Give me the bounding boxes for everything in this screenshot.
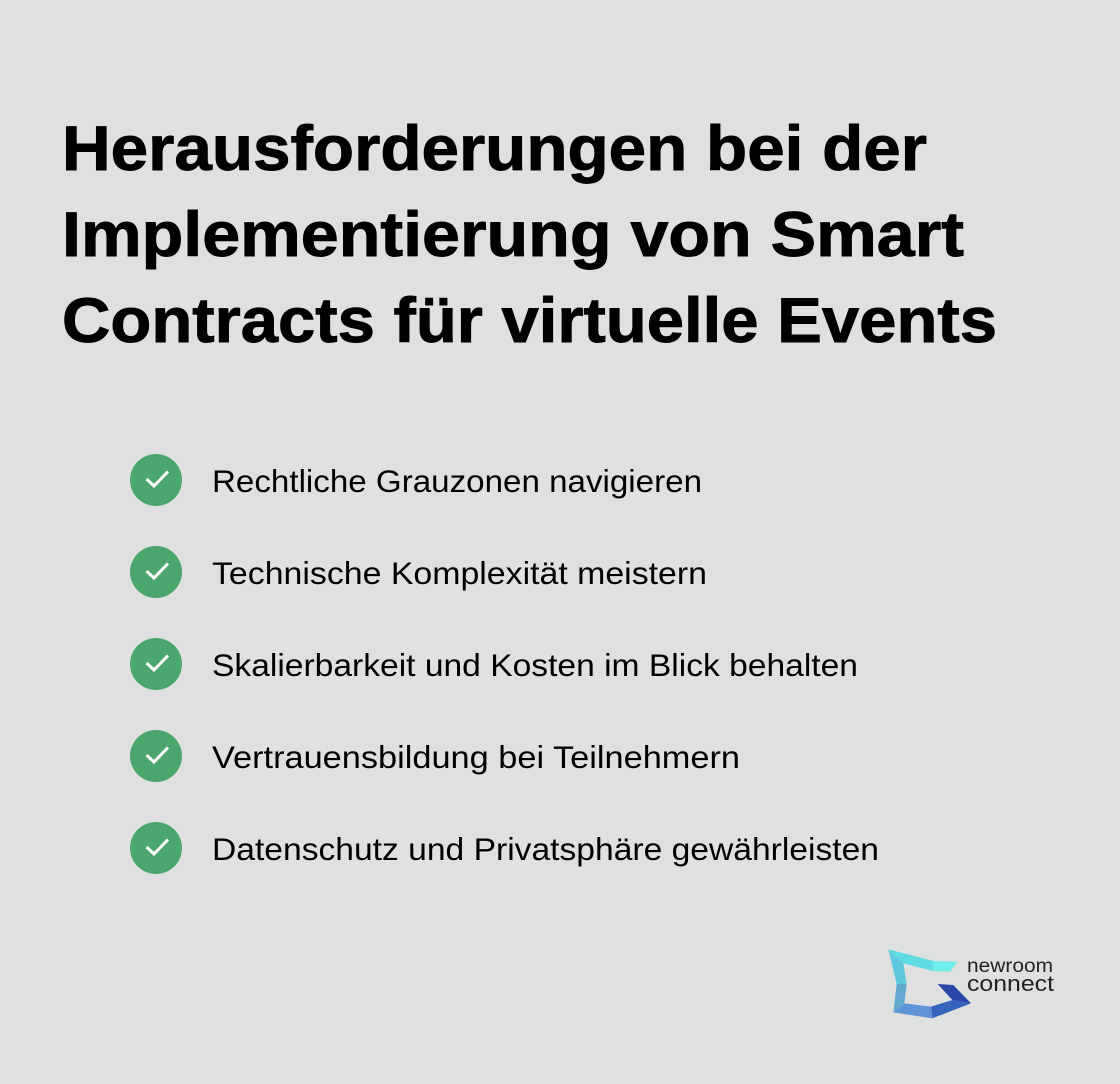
item: Vertrauensbildung bei Teilnehmern: Vertrauensbildung bei Teilnehmern xyxy=(212,739,740,775)
wordmark: connect xyxy=(967,971,1054,996)
item: Vertrauensbildung bei Teilnehmern xyxy=(130,730,740,782)
item: Rechtliche Grauzonen navigieren: Rechtliche Grauzonen navigieren xyxy=(212,463,702,499)
item: Datenschutz und Privatsphäre gewährleisten xyxy=(130,822,879,874)
logo: newroom connect xyxy=(888,949,1054,1018)
wordmark xyxy=(967,956,1054,996)
item: Datenschutz und Privatsphäre gewährleisten: Datenschutz und Privatsphäre gewährleisten xyxy=(212,831,879,867)
checklist xyxy=(130,454,879,874)
icon: logo mark xyxy=(888,949,971,1018)
title: Herausforderungen bei der xyxy=(62,114,927,184)
item: Rechtliche Grauzonen navigieren xyxy=(130,454,702,506)
title xyxy=(62,114,997,356)
item: Skalierbarkeit und Kosten im Blick behalten: Skalierbarkeit und Kosten im Blick behalten xyxy=(212,647,858,683)
item: Technische Komplexität meistern: Technische Komplexität meistern xyxy=(212,555,707,591)
title: Contracts für virtuelle Events xyxy=(62,286,997,356)
item: Technische Komplexität meistern xyxy=(130,546,707,598)
item: Skalierbarkeit und Kosten im Blick behalten xyxy=(130,638,858,690)
wordmark: newroom xyxy=(967,956,1053,977)
title: Implementierung von Smart xyxy=(62,200,964,270)
